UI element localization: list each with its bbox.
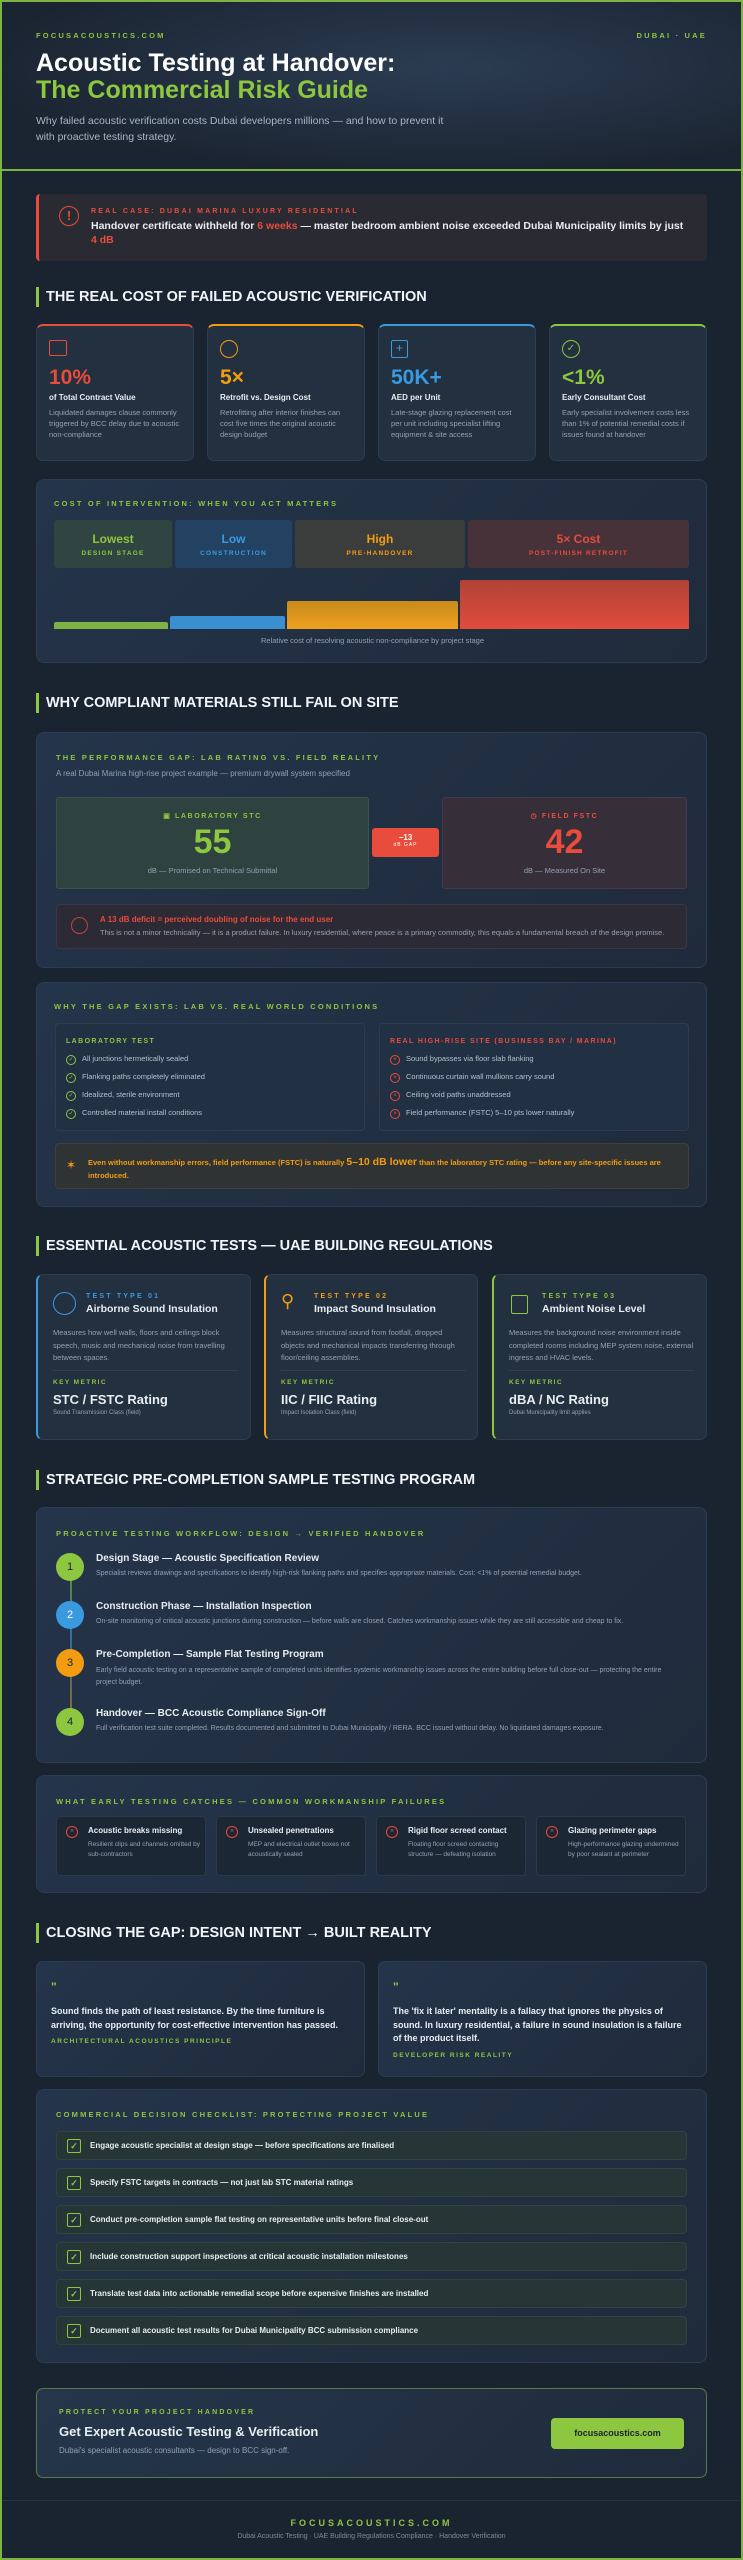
- stage boxes: Low: [222, 532, 246, 546]
- lab STC box: dB — Promised on Technical Submittal: [148, 866, 277, 875]
- lab STC box: 55: [194, 823, 231, 861]
- panel title: COST OF INTERVENTION: WHEN YOU ACT MATTERS: [54, 499, 338, 508]
- title: The Commercial Risk Guide: [36, 76, 368, 104]
- quote 1: Sound finds the path of least resistance. By the time furniture is arriving, the opportunity for cost-effective intervention has passed.: [51, 2006, 338, 2030]
- lab column: LABORATORY TEST: [66, 1038, 155, 1045]
- panel title: COMMERCIAL DECISION CHECKLIST: PROTECTING PROJECT VALUE: [56, 2110, 429, 2119]
- quote 1: [36, 1961, 365, 2077]
- step 3: Pre-Completion — Sample Flat Testing Program: [96, 1649, 324, 1660]
- card: airborne: KEY METRIC: [53, 1379, 107, 1386]
- lab column: Flanking paths completely eliminated: [82, 1072, 205, 1081]
- checklist items: ✓: [70, 2252, 78, 2262]
- failure items: ×: [70, 1828, 74, 1835]
- gap badge: [372, 828, 439, 857]
- quote 1: ARCHITECTURAL ACOUSTICS PRINCIPLE: [51, 2038, 232, 2045]
- lab column: ✓: [68, 1093, 74, 1099]
- panel title: PROACTIVE TESTING WORKFLOW: DESIGN → VERIFIED HANDOVER: [56, 1529, 426, 1538]
- site column: ×: [393, 1111, 397, 1117]
- CTA text: Dubai's specialist acoustic consultants — design to BCC sign-off.: [59, 2446, 289, 2455]
- panel: early testing catches: [36, 1775, 707, 1893]
- card: ambient: Measures the background noise environment inside completed rooms including MEP system noise, external ingress and HVAC levels.: [509, 1328, 693, 1362]
- note callout: Even without workmanship errors, field performance (FSTC) is naturally 5–10 dB lower than the laboratory STC rating — before any site-specific issues are introduced.: [88, 1156, 661, 1180]
- step 2: Construction Phase — Installation Inspection: [96, 1601, 312, 1612]
- panel title: THE PERFORMANCE GAP: LAB RATING VS. FIELD REALITY: [56, 753, 380, 762]
- checklist items: Document all acoustic test results for Dubai Municipality BCC submission compliance: [90, 2326, 418, 2335]
- card: 10%: 10%: [49, 366, 91, 389]
- note callout: ✶: [66, 1158, 76, 1172]
- site column: ×: [393, 1057, 397, 1063]
- card: impact: Impact Sound Insulation: [314, 1303, 436, 1315]
- step 4: 4: [67, 1716, 73, 1728]
- CTA text: [59, 2409, 318, 2455]
- stage boxes: [54, 520, 689, 568]
- panel: why the gap exists: [36, 982, 707, 1207]
- card: 50K+: AED per Unit: [391, 393, 440, 402]
- site column: ×: [393, 1093, 397, 1099]
- field FSTC box: ◷ FIELD FSTC: [531, 813, 598, 820]
- gap badge: −13: [399, 833, 412, 842]
- brand label: FOCUSACOUSTICS.COM: [36, 31, 166, 40]
- CTA button: [551, 2418, 684, 2449]
- stage boxes: 5× Cost: [557, 532, 600, 546]
- site column: Continuous curtain wall mullions carry sound: [406, 1072, 554, 1081]
- lab column: All junctions hermetically sealed: [82, 1054, 188, 1063]
- failure items: MEP and electrical outlet boxes not acoustically sealed: [248, 1841, 350, 1858]
- checklist items: Translate test data into actionable remedial scope before expensive finishes are installed: [90, 2289, 428, 2298]
- quote 2: ": [393, 1980, 399, 1994]
- failure items: ×: [230, 1828, 234, 1835]
- card: 5x: [207, 324, 365, 461]
- deficit callout: [56, 904, 687, 949]
- stage boxes: DESIGN STAGE: [81, 550, 145, 557]
- card: ambient: TEST TYPE 03: [542, 1293, 616, 1300]
- stage boxes: High: [367, 532, 393, 546]
- card: 10%: of Total Contract Value: [49, 393, 136, 402]
- card: <1%: <1%: [562, 366, 605, 389]
- CTA button: focusacoustics.com: [574, 2428, 661, 2438]
- checklist items: Conduct pre-completion sample flat testing on representative units before final close-out: [90, 2215, 428, 2224]
- card: impact: KEY METRIC: [281, 1379, 335, 1386]
- checklist items: Engage acoustic specialist at design stage — before specifications are finalised: [90, 2141, 394, 2150]
- card: <1%: Early specialist involvement costs less than 1% of potential remedial costs if issues found at handover: [562, 408, 689, 439]
- lab column: ✓: [68, 1075, 74, 1081]
- alert text: Handover certificate withheld for 6 weeks — master bedroom ambient noise exceeded Dubai Municipality limits by just 4 dB: [91, 220, 683, 246]
- card: airborne: Sound Transmission Class (field): [53, 1410, 141, 1416]
- section heading: strategic program: STRATEGIC PRE-COMPLETION SAMPLE TESTING PROGRAM: [46, 1472, 475, 1488]
- card: ambient: KEY METRIC: [509, 1379, 563, 1386]
- card: impact: [264, 1274, 478, 1440]
- quote 2: [378, 1961, 707, 2077]
- failure items: ×: [390, 1828, 394, 1835]
- card: impact: Impact Isolation Class (field): [281, 1410, 356, 1416]
- lab column: ✓: [68, 1057, 74, 1063]
- quote 1: ": [51, 1980, 57, 1994]
- stage boxes: CONSTRUCTION: [200, 550, 267, 557]
- card: <1%: ✓: [567, 343, 575, 354]
- failure items: Unsealed penetrations: [248, 1826, 334, 1835]
- card: airborne: STC / FSTC Rating: [53, 1392, 168, 1407]
- chart caption: Relative cost of resolving acoustic non-compliance by project stage: [261, 636, 484, 645]
- step 3: [56, 1649, 662, 1686]
- connector line: [70, 1576, 72, 1716]
- checklist items: Include construction support inspections at critical acoustic installation milestones: [90, 2252, 408, 2261]
- site column: REAL HIGH-RISE SITE (BUSINESS BAY / MARINA): [390, 1038, 617, 1045]
- panel title: WHY THE GAP EXISTS: LAB VS. REAL WORLD CONDITIONS: [54, 1002, 379, 1011]
- failure items: Floating floor screed contacting structure — defeating isolation: [408, 1841, 498, 1858]
- lab column: ✓: [68, 1111, 74, 1117]
- section heading: closing the gap: CLOSING THE GAP: DESIGN INTENT → BUILT REALITY: [46, 1925, 432, 1941]
- bar chart: [54, 580, 689, 629]
- stage boxes: POST-FINISH RETROFIT: [529, 550, 628, 557]
- test cards: [36, 1274, 707, 1440]
- card: impact: TEST TYPE 02: [314, 1293, 388, 1300]
- step 3: 3: [67, 1657, 73, 1669]
- site column: ×: [393, 1075, 397, 1081]
- card: 5x: 5×: [220, 366, 244, 389]
- card: impact: IIC / FIIC Rating: [281, 1392, 377, 1407]
- card: ambient: [492, 1274, 707, 1440]
- failure items: [57, 1816, 686, 1876]
- card: 10%: Liquidated damages clause commonly triggered by BCC delay due to acoustic non-compliance: [49, 408, 179, 439]
- card: 5x: Retrofitting after interior finishes can cost five times the original acoustic design budget: [220, 408, 340, 439]
- section heading: essential tests: ESSENTIAL ACOUSTIC TESTS — UAE BUILDING REGULATIONS: [46, 1238, 493, 1254]
- CTA text: Get Expert Acoustic Testing & Verification: [59, 2424, 318, 2439]
- card: 50K+: [378, 324, 536, 461]
- site column: Field performance (FSTC) 5–10 pts lower naturally: [406, 1108, 574, 1117]
- alert: real case: [36, 194, 707, 261]
- checklist items: ✓: [70, 2178, 78, 2188]
- step 4: Full verification test suite completed. Results documented and submitted to Dubai Municipality / RERA. BCC issued without delay. No liquidated damages exposure.: [96, 1725, 604, 1732]
- title: Acoustic Testing at Handover:: [36, 49, 395, 77]
- failure items: Glazing perimeter gaps: [568, 1826, 656, 1835]
- deficit callout: A 13 dB deficit = perceived doubling of noise for the end user: [100, 915, 333, 924]
- card: <1%: Early Consultant Cost: [562, 393, 646, 402]
- site column: [379, 1023, 689, 1131]
- step 1: Specialist reviews drawings and specifications to identify high-risk flanking paths and specifies appropriate materials. Cost: <1% of potential remedial budget.: [96, 1570, 582, 1577]
- deficit callout: This is not a minor technicality — it is a product failure. In luxury residential, where peace is a primary commodity, this equals a fundamental breach of the design promise.: [100, 928, 664, 937]
- quote 2: DEVELOPER RISK REALITY: [393, 2052, 513, 2058]
- card: ambient: Ambient Noise Level: [542, 1303, 645, 1315]
- panel: workflow: [36, 1507, 707, 1763]
- card: airborne: TEST TYPE 01: [86, 1293, 160, 1300]
- step 2: 2: [67, 1609, 73, 1621]
- failure items: Rigid floor screed contact: [408, 1826, 507, 1835]
- panel: checklist: [36, 2089, 707, 2363]
- card: 50K+: Late-stage glazing replacement cost per unit including specialist lifting equipment & site access: [391, 408, 512, 439]
- icon: alert: !: [67, 208, 71, 223]
- lab STC box: [56, 797, 369, 889]
- card: impact: Measures structural sound from footfall, dropped objects and mechanical impacts transferring through floor/ceiling assemblies.: [281, 1328, 455, 1362]
- stage boxes: Lowest: [92, 532, 134, 546]
- alert text: [91, 208, 684, 246]
- CTA panel: [36, 2388, 707, 2478]
- lab STC box: ▣ LABORATORY STC: [163, 813, 262, 820]
- card: impact: ⚲: [281, 1291, 294, 1311]
- panel: cost of intervention: [36, 479, 707, 663]
- card: ambient: Dubai Municipality limit applies: [509, 1410, 591, 1416]
- checklist items: ✓: [70, 2141, 78, 2151]
- card: ambient: dBA / NC Rating: [509, 1392, 609, 1407]
- checklist items: ✓: [70, 2326, 78, 2336]
- step 2: On-site monitoring of critical acoustic junctions during construction — before walls are closed. Catches workmanship issues while they are still accessible and cheap to fix.: [96, 1618, 623, 1625]
- stage boxes: PRE-HANDOVER: [346, 550, 414, 557]
- title: [36, 49, 395, 104]
- quote cards: [36, 1961, 707, 2077]
- card: 50K+: +: [396, 341, 403, 355]
- field FSTC box: dB — Measured On Site: [524, 866, 605, 875]
- failure items: High-performance glazing undermined by poor sealant at perimeter: [568, 1841, 679, 1858]
- card: 5x: Retrofit vs. Design Cost: [220, 393, 311, 402]
- step 1: 1: [67, 1561, 73, 1573]
- failure items: ×: [550, 1828, 554, 1835]
- card: 10%: [36, 324, 194, 461]
- checklist items: [56, 2131, 687, 2345]
- stat cards: [36, 324, 707, 461]
- site column: Ceiling void paths unaddressed: [406, 1090, 511, 1099]
- checklist items: ✓: [70, 2289, 78, 2299]
- note callout: [55, 1143, 689, 1189]
- icon: alert: [59, 206, 79, 226]
- location label: DUBAI · UAE: [637, 31, 707, 40]
- field FSTC box: [442, 797, 687, 889]
- lab column: [55, 1023, 365, 1131]
- quote 2: The 'fix it later' mentality is a fallacy that ignores the physics of sound. In luxury residential, a failure in sound insulation is a failure of the product itself.: [393, 2006, 682, 2043]
- panel: performance gap: [36, 732, 707, 968]
- failure items: Acoustic breaks missing: [88, 1826, 182, 1835]
- card: 50K+: 50K+: [391, 366, 442, 389]
- checklist items: Specify FSTC targets in contracts — not just lab STC material ratings: [90, 2178, 353, 2187]
- step 1: Design Stage — Acoustic Specification Review: [96, 1553, 319, 1564]
- gap badge: dB GAP: [393, 842, 418, 848]
- panel title: WHAT EARLY TESTING CATCHES — COMMON WORKMANSHIP FAILURES: [56, 1797, 446, 1806]
- step 3: Early field acoustic testing on a representative sample of completed units identifies systemic workmanship issues across the entire building before full close-out — protecting the entire project budget.: [96, 1667, 661, 1686]
- lab column: Idealized, sterile environment: [82, 1090, 180, 1099]
- card: <1%: [549, 324, 707, 461]
- failure items: Resilient clips and channels omitted by sub-contractors: [88, 1841, 200, 1858]
- card: airborne: Airborne Sound Insulation: [86, 1303, 218, 1315]
- alert text: REAL CASE: DUBAI MARINA LUXURY RESIDENTIAL: [91, 208, 359, 215]
- header: [0, 0, 743, 171]
- step 1: [56, 1553, 582, 1581]
- field FSTC box: 42: [546, 823, 583, 861]
- CTA text: PROTECT YOUR PROJECT HANDOVER: [59, 2409, 255, 2416]
- card: airborne: Measures how well walls, floors and ceilings block speech, music and mechanical noise from travelling between spaces.: [53, 1328, 225, 1362]
- card: airborne: [36, 1274, 251, 1440]
- step 4: Handover — BCC Acoustic Compliance Sign-Off: [96, 1708, 326, 1719]
- footer: [0, 2500, 743, 2560]
- site column: Sound bypasses via floor slab flanking: [406, 1054, 534, 1063]
- footer: FOCUSACOUSTICS.COM: [290, 2518, 452, 2528]
- section heading: why compliant: WHY COMPLIANT MATERIALS STILL FAIL ON SITE: [46, 695, 399, 711]
- lab column: Controlled material install conditions: [82, 1108, 202, 1117]
- step 4: [56, 1708, 604, 1736]
- section heading: real cost: THE REAL COST OF FAILED ACOUSTIC VERIFICATION: [46, 289, 427, 305]
- checklist items: ✓: [70, 2215, 78, 2225]
- footer: Dubai Acoustic Testing · UAE Building Regulations Compliance · Handover Verification: [237, 2533, 506, 2540]
- step 2: [56, 1601, 623, 1629]
- panel subtitle: A real Dubai Marina high-rise project example — premium drywall system specified: [56, 769, 350, 778]
- subtitle: Why failed acoustic verification costs Dubai developers millions — and how to prevent it with proactive testing strategy.: [36, 115, 443, 143]
